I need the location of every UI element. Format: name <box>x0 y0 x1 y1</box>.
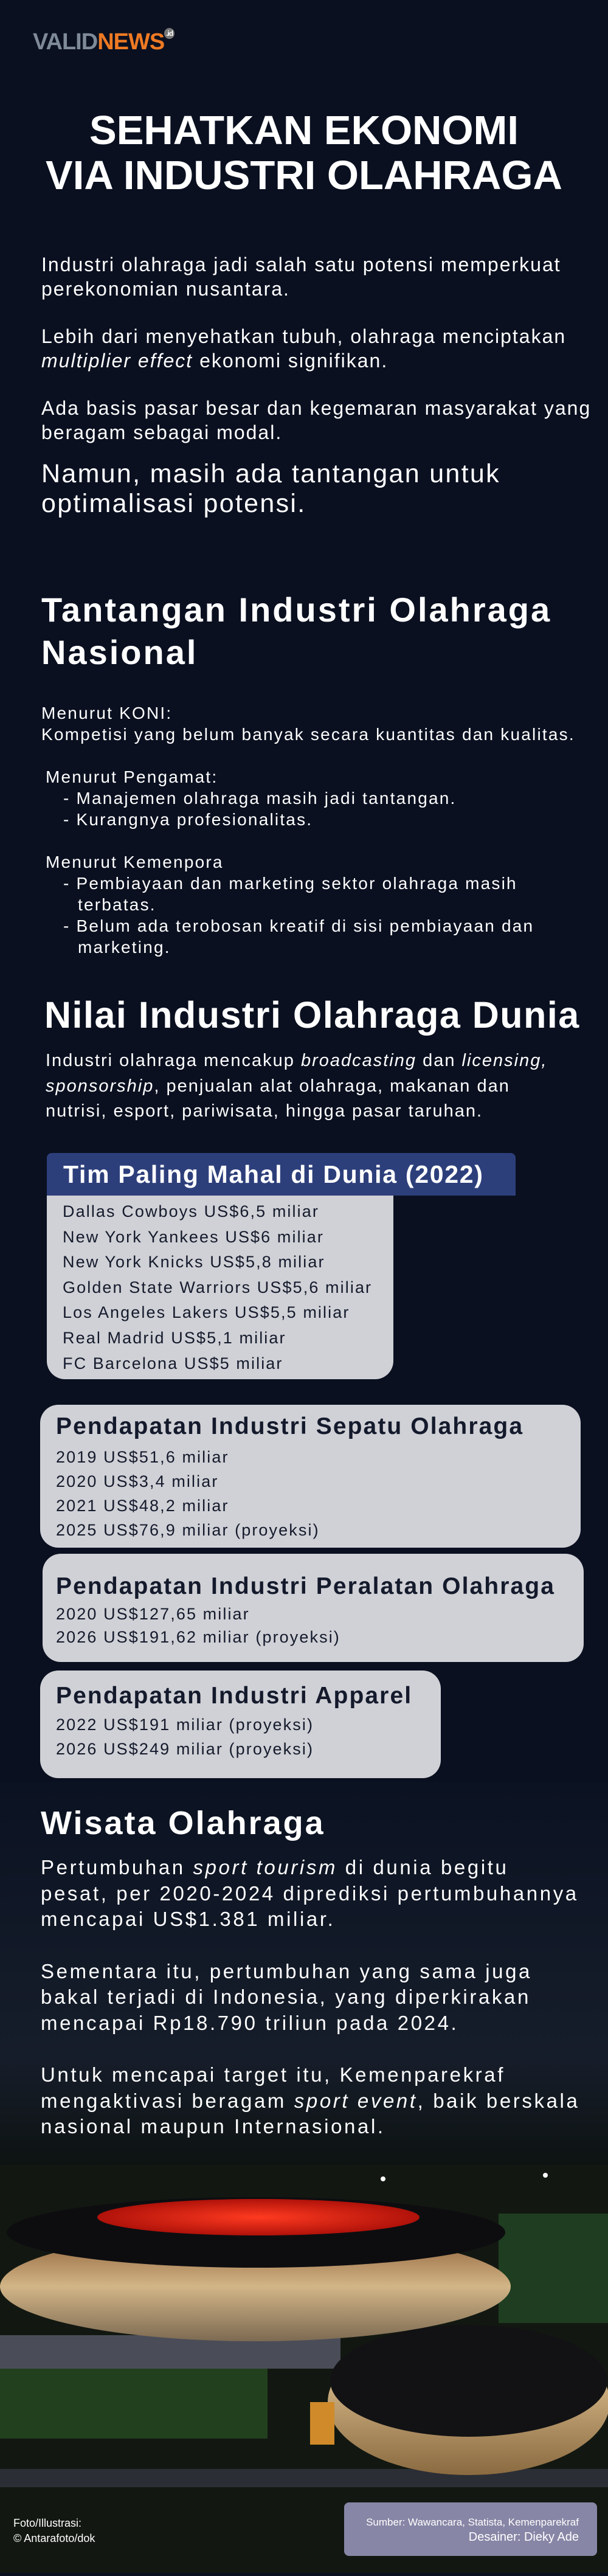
heading: Tantangan: Tantangan Industri Olahraga <box>41 590 551 629</box>
text block: challenges <box>41 704 575 957</box>
title: SEHATKAN EKONOMI <box>89 108 519 153</box>
panel: sepatu: 2019 US$51,6 miliar <box>56 1448 229 1466</box>
callout: Namun: optimalisasi potensi. <box>41 489 306 518</box>
text block: challenges: - Belum ada terobosan kreatif di sisi pembiayaan dan <box>63 916 534 935</box>
text block: challenges: - Pembiayaan dan marketing sektor olahraga masih <box>63 874 517 893</box>
panel: apparel: 2026 US$249 miliar (proyeksi) <box>56 1740 314 1758</box>
panel: teams: Dallas Cowboys US$6,5 miliar <box>63 1202 319 1220</box>
panel: teams: Los Angeles Lakers US$5,5 miliar <box>63 1303 350 1321</box>
panel: peralatan: 2026 US$191,62 miliar (proyeksi) <box>56 1628 340 1646</box>
panel: apparel: 2022 US$191 miliar (proyeksi) <box>56 1716 314 1734</box>
title <box>46 108 562 198</box>
panel: apparel <box>40 1671 441 1778</box>
source box: Desainer: Dieky Ade <box>469 2530 579 2544</box>
photo credit: Foto/Illustrasi: <box>13 2517 81 2529</box>
panel: teams: Golden State Warriors US$5,6 miliar <box>63 1278 372 1297</box>
panel: sepatu <box>40 1405 581 1548</box>
intro text: Lebih dari menyehatkan tubuh, olahraga menciptakan <box>41 325 566 347</box>
text block: industry scope: Industri olahraga mencakup broadcasting dan licensing, <box>46 1051 547 1070</box>
photo credit <box>13 2517 95 2544</box>
text block: challenges: - Kurangnya profesionalitas. <box>63 810 313 829</box>
heading: Tantangan <box>41 590 551 671</box>
intro text: multiplier effect ekonomi signifikan. <box>41 350 388 372</box>
text block: sport tourism: Sementara itu, pertumbuhan yang sama juga <box>41 1959 532 1982</box>
panel: teams: New York Knicks US$5,8 miliar <box>63 1253 325 1271</box>
panel: apparel: Pendapatan Industri Apparel <box>56 1683 412 1709</box>
panel: peralatan: Pendapatan Industri Peralatan Olahraga <box>56 1573 555 1599</box>
text block: sport tourism: mencapai US$1.381 miliar. <box>41 1908 335 1930</box>
panel: teams: FC Barcelona US$5 miliar <box>63 1354 283 1373</box>
intro text: Industri olahraga jadi salah satu potensi memperkuat <box>41 254 561 275</box>
text block: challenges: Menurut KONI: <box>41 704 172 722</box>
text block: sport tourism: Pertumbuhan sport tourism di dunia begitu <box>41 1856 508 1878</box>
source box <box>344 2502 597 2556</box>
text block: challenges: - Manajemen olahraga masih jadi tantangan. <box>63 789 457 808</box>
photo credit: © Antarafoto/dok <box>13 2532 95 2544</box>
text block: sport tourism: mengaktivasi beragam sport event, baik berskala <box>41 2090 579 2111</box>
source box: Sumber: Wawancara, Statista, Kemenparekraf <box>366 2516 579 2528</box>
text block: sport tourism <box>41 1856 579 2138</box>
text block: challenges: Kompetisi yang belum banyak secara kuantitas dan kualitas. <box>41 725 575 744</box>
photo background: stadium <box>0 1933 608 2573</box>
callout: Namun <box>41 459 500 518</box>
title: VIA INDUSTRI OLAHRAGA <box>46 153 562 198</box>
text block: industry scope <box>46 1051 547 1121</box>
text block: challenges: marketing. <box>78 938 171 957</box>
panel: teams: New York Yankees US$6 miliar <box>63 1228 324 1246</box>
text block: sport tourism: pesat, per 2020-2024 diprediksi pertumbuhannya <box>41 1882 579 1905</box>
panel: teams <box>47 1174 393 1379</box>
text block: sport tourism: nasional maupun Internasional. <box>41 2115 385 2138</box>
intro text <box>41 254 591 443</box>
logo: VALIDNEWS.id <box>33 29 173 55</box>
panel header: Tim Paling Mahal <box>47 1153 516 1196</box>
text block: sport tourism: mencapai Rp18.790 triliun pada 2024. <box>41 2012 458 2034</box>
text block: sport tourism: Untuk mencapai target itu, Kemenparekraf <box>41 2063 505 2086</box>
panel: peralatan: 2020 US$127,65 miliar <box>56 1605 250 1623</box>
text block: challenges: Menurut Pengamat: <box>46 767 218 786</box>
panel header: Tim Paling Mahal: Tim Paling Mahal di Dunia (2022) <box>63 1160 484 1188</box>
panel: sepatu: 2025 US$76,9 miliar (proyeksi) <box>56 1521 320 1539</box>
text block: industry scope: sponsorship, penjualan alat olahraga, makanan dan <box>46 1076 510 1096</box>
text block: sport tourism: bakal terjadi di Indonesia, yang diperkirakan <box>41 1986 531 2008</box>
panel: teams: Real Madrid US$5,1 miliar <box>63 1329 286 1347</box>
intro text: beragam sebagai modal. <box>41 421 282 443</box>
panel: sepatu: Pendapatan Industri Sepatu Olahraga <box>56 1413 523 1439</box>
callout: Namun: Namun, masih ada tantangan untuk <box>41 459 500 488</box>
text block: industry scope: nutrisi, esport, pariwisata, hingga pasar taruhan. <box>46 1101 483 1121</box>
intro text: perekonomian nusantara. <box>41 278 290 300</box>
heading: Wisata Olahraga: Wisata Olahraga <box>41 1805 325 1841</box>
heading: Nilai Industri: Nilai Industri Olahraga Dunia <box>44 994 580 1036</box>
panel: sepatu: 2020 US$3,4 miliar <box>56 1472 218 1491</box>
panel: sepatu: 2021 US$48,2 miliar <box>56 1497 229 1515</box>
text block: challenges: Menurut Kemenpora <box>46 853 224 871</box>
panel: peralatan <box>43 1554 584 1662</box>
text block: challenges: terbatas. <box>78 895 156 914</box>
heading: Tantangan: Nasional <box>41 633 198 671</box>
intro text: Ada basis pasar besar dan kegemaran masyarakat yang <box>41 397 591 419</box>
